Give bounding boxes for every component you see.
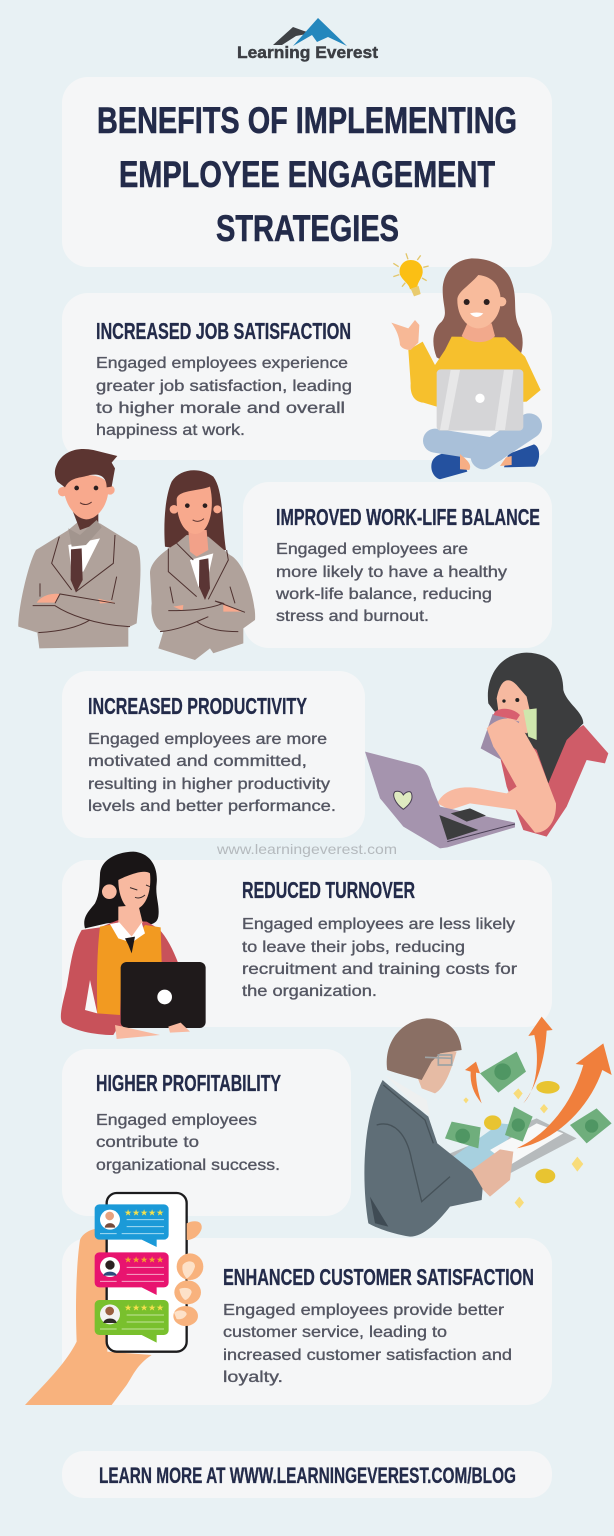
- illustration: woman with black laptop: [61, 852, 206, 1039]
- text block: work-life balance: Engaged employees are: [276, 541, 468, 558]
- text block: work-life balance: more likely to have a healthy: [276, 564, 507, 581]
- text block: work-life balance: [275, 541, 507, 625]
- illustration: man with tablet and flying money: [364, 1017, 612, 1237]
- title text: EMPLOYEE ENGAGEMENT: [119, 154, 495, 195]
- text block: turnover: the organization.: [242, 983, 377, 1000]
- panel: reduced turnover: [62, 860, 552, 1027]
- heading: increased productivity: INCREASED PRODUCTIVITY: [88, 693, 307, 719]
- logo: Learning Everest: [237, 18, 378, 62]
- text block: job satisfaction: Engaged employees experience: [96, 355, 348, 372]
- panel: increased job satisfaction: [62, 293, 552, 460]
- text block: customer satisfaction: customer service, leading to: [223, 1324, 447, 1341]
- illustration: woman drinking at laptop: [365, 653, 608, 848]
- text block: profitability: organizational success.: [96, 1157, 280, 1174]
- panel: higher profitability: [62, 1049, 351, 1216]
- heading: higher profitability: HIGHER PROFITABILITY: [96, 1070, 281, 1096]
- text block: customer satisfaction: [223, 1302, 512, 1386]
- illustration: two colleagues in suits: [18, 449, 255, 660]
- text block: productivity: resulting in higher productivity: [88, 776, 330, 793]
- logo: Learning Everest: Learning Everest: [237, 43, 378, 62]
- review card: blue: ★★★★★: [124, 1207, 164, 1217]
- text block: productivity: levels and better performance.: [88, 798, 336, 815]
- text block: profitability: contribute to: [96, 1134, 199, 1151]
- text block: turnover: recruitment and training costs for: [242, 961, 518, 978]
- text block: customer satisfaction: Engaged employees provide better: [223, 1302, 505, 1319]
- panel: increased productivity: [62, 671, 365, 838]
- review card: green: [95, 1300, 169, 1343]
- heading: reduced turnover: REDUCED TURNOVER: [242, 877, 415, 903]
- text block: job satisfaction: happiness at work.: [96, 422, 245, 439]
- review card: pink: [95, 1252, 169, 1295]
- text block: job satisfaction: [96, 355, 352, 439]
- panel: footer call to action: [62, 1451, 552, 1498]
- text block: job satisfaction: to higher morale and overall: [96, 400, 345, 417]
- text block: productivity: Engaged employees are more: [88, 731, 327, 748]
- text block: job satisfaction: greater job satisfaction, leading: [96, 378, 352, 395]
- watermark url: www.learningeverest.com: [216, 841, 397, 857]
- review card: pink: ★★★★★: [124, 1255, 164, 1265]
- text block: customer satisfaction: loyalty.: [223, 1369, 283, 1386]
- text block: work-life balance: work-life balance, reducing: [275, 586, 492, 603]
- heading: increased job satisfaction: INCREASED JOB SATISFACTION: [96, 318, 351, 344]
- review card: blue: [95, 1204, 169, 1247]
- review card: green: ★★★★★: [124, 1302, 164, 1312]
- man in suit: [18, 449, 141, 648]
- title text: [97, 100, 517, 249]
- text block: productivity: motivated and committed,: [88, 753, 307, 770]
- text block: turnover: [242, 916, 518, 1000]
- text block: customer satisfaction: increased customer satisfaction and: [223, 1347, 512, 1364]
- text block: turnover: Engaged employees are less likely: [242, 916, 515, 933]
- text block: turnover: to leave their jobs, reducing: [242, 939, 465, 956]
- panel: improved work-life balance: [243, 482, 552, 648]
- text block: productivity: [88, 731, 336, 815]
- panel: enhanced customer satisfaction: [62, 1238, 552, 1405]
- text block: work-life balance: stress and burnout.: [276, 608, 429, 625]
- panel: title: [62, 77, 552, 267]
- woman in suit: [150, 470, 255, 660]
- illustration: woman with laptop and light bulb: [391, 253, 541, 479]
- text block: profitability: [96, 1112, 280, 1174]
- title text: STRATEGIES: [216, 208, 399, 249]
- text block: profitability: Engaged employees: [96, 1112, 257, 1129]
- illustration: hand holding phone with reviews: [25, 1193, 203, 1405]
